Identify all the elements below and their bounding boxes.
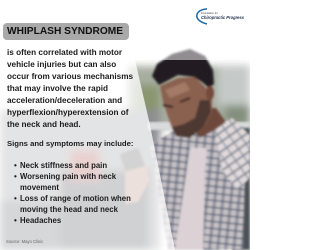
hand bbox=[125, 166, 150, 204]
intro paragraph: that may involve the rapid bbox=[7, 84, 108, 93]
intro paragraph: occur from various mechanisms bbox=[7, 72, 133, 81]
intro paragraph bbox=[7, 48, 133, 129]
list text: moving the head and neck bbox=[20, 205, 118, 214]
dark car at right bbox=[232, 128, 250, 250]
background photo: man holding neck and phone beside car bbox=[0, 48, 250, 250]
list text bbox=[20, 161, 131, 225]
bullet markers: • bbox=[14, 172, 17, 181]
intro paragraph: the neck and head. bbox=[7, 120, 81, 129]
forehead highlight bbox=[165, 82, 190, 98]
intro paragraph: acceleration/deceleration and bbox=[7, 96, 122, 105]
list text: movement bbox=[20, 183, 59, 192]
intro paragraph: vehicle injuries but can also bbox=[7, 60, 116, 69]
symptom list bbox=[14, 161, 131, 225]
car roof band bbox=[148, 122, 250, 130]
logo small text: Foundation for bbox=[201, 12, 218, 15]
neck and hand bbox=[192, 108, 226, 138]
intro paragraph: is often correlated with motor bbox=[7, 48, 122, 57]
t-shirt bbox=[175, 148, 207, 250]
shirt body bbox=[150, 125, 245, 250]
logo: Foundation for Chiropractic Progress bbox=[196, 8, 244, 25]
title: WHIPLASH SYNDROME bbox=[7, 26, 123, 37]
source note: Source: Mayo Clinic bbox=[6, 239, 43, 244]
list text: Neck stiffness and pain bbox=[20, 161, 107, 170]
translucent white text panel bbox=[0, 48, 209, 250]
list text: Worsening pain with neck bbox=[20, 172, 116, 181]
ear bbox=[206, 86, 214, 100]
heading pill bbox=[3, 23, 129, 40]
hair bbox=[152, 49, 214, 88]
bullet markers: • bbox=[14, 194, 17, 203]
intro paragraph: hyperflexion/hyperextension of bbox=[7, 108, 128, 117]
bullet markers: • bbox=[14, 216, 17, 225]
bullet markers: • bbox=[14, 161, 17, 170]
eyes bbox=[163, 98, 190, 107]
list text: Loss of range of motion when bbox=[20, 194, 131, 203]
bullet markers bbox=[14, 161, 17, 225]
list text: Headaches bbox=[20, 216, 61, 225]
signs and symptoms heading: Signs and symptoms may include: bbox=[7, 139, 133, 148]
raised arm bbox=[214, 118, 250, 190]
face bbox=[160, 77, 212, 137]
logo swoosh bbox=[196, 8, 208, 25]
logo name: Chiropractic Progress bbox=[201, 15, 244, 20]
phone bbox=[119, 147, 149, 183]
beard bbox=[172, 100, 211, 138]
